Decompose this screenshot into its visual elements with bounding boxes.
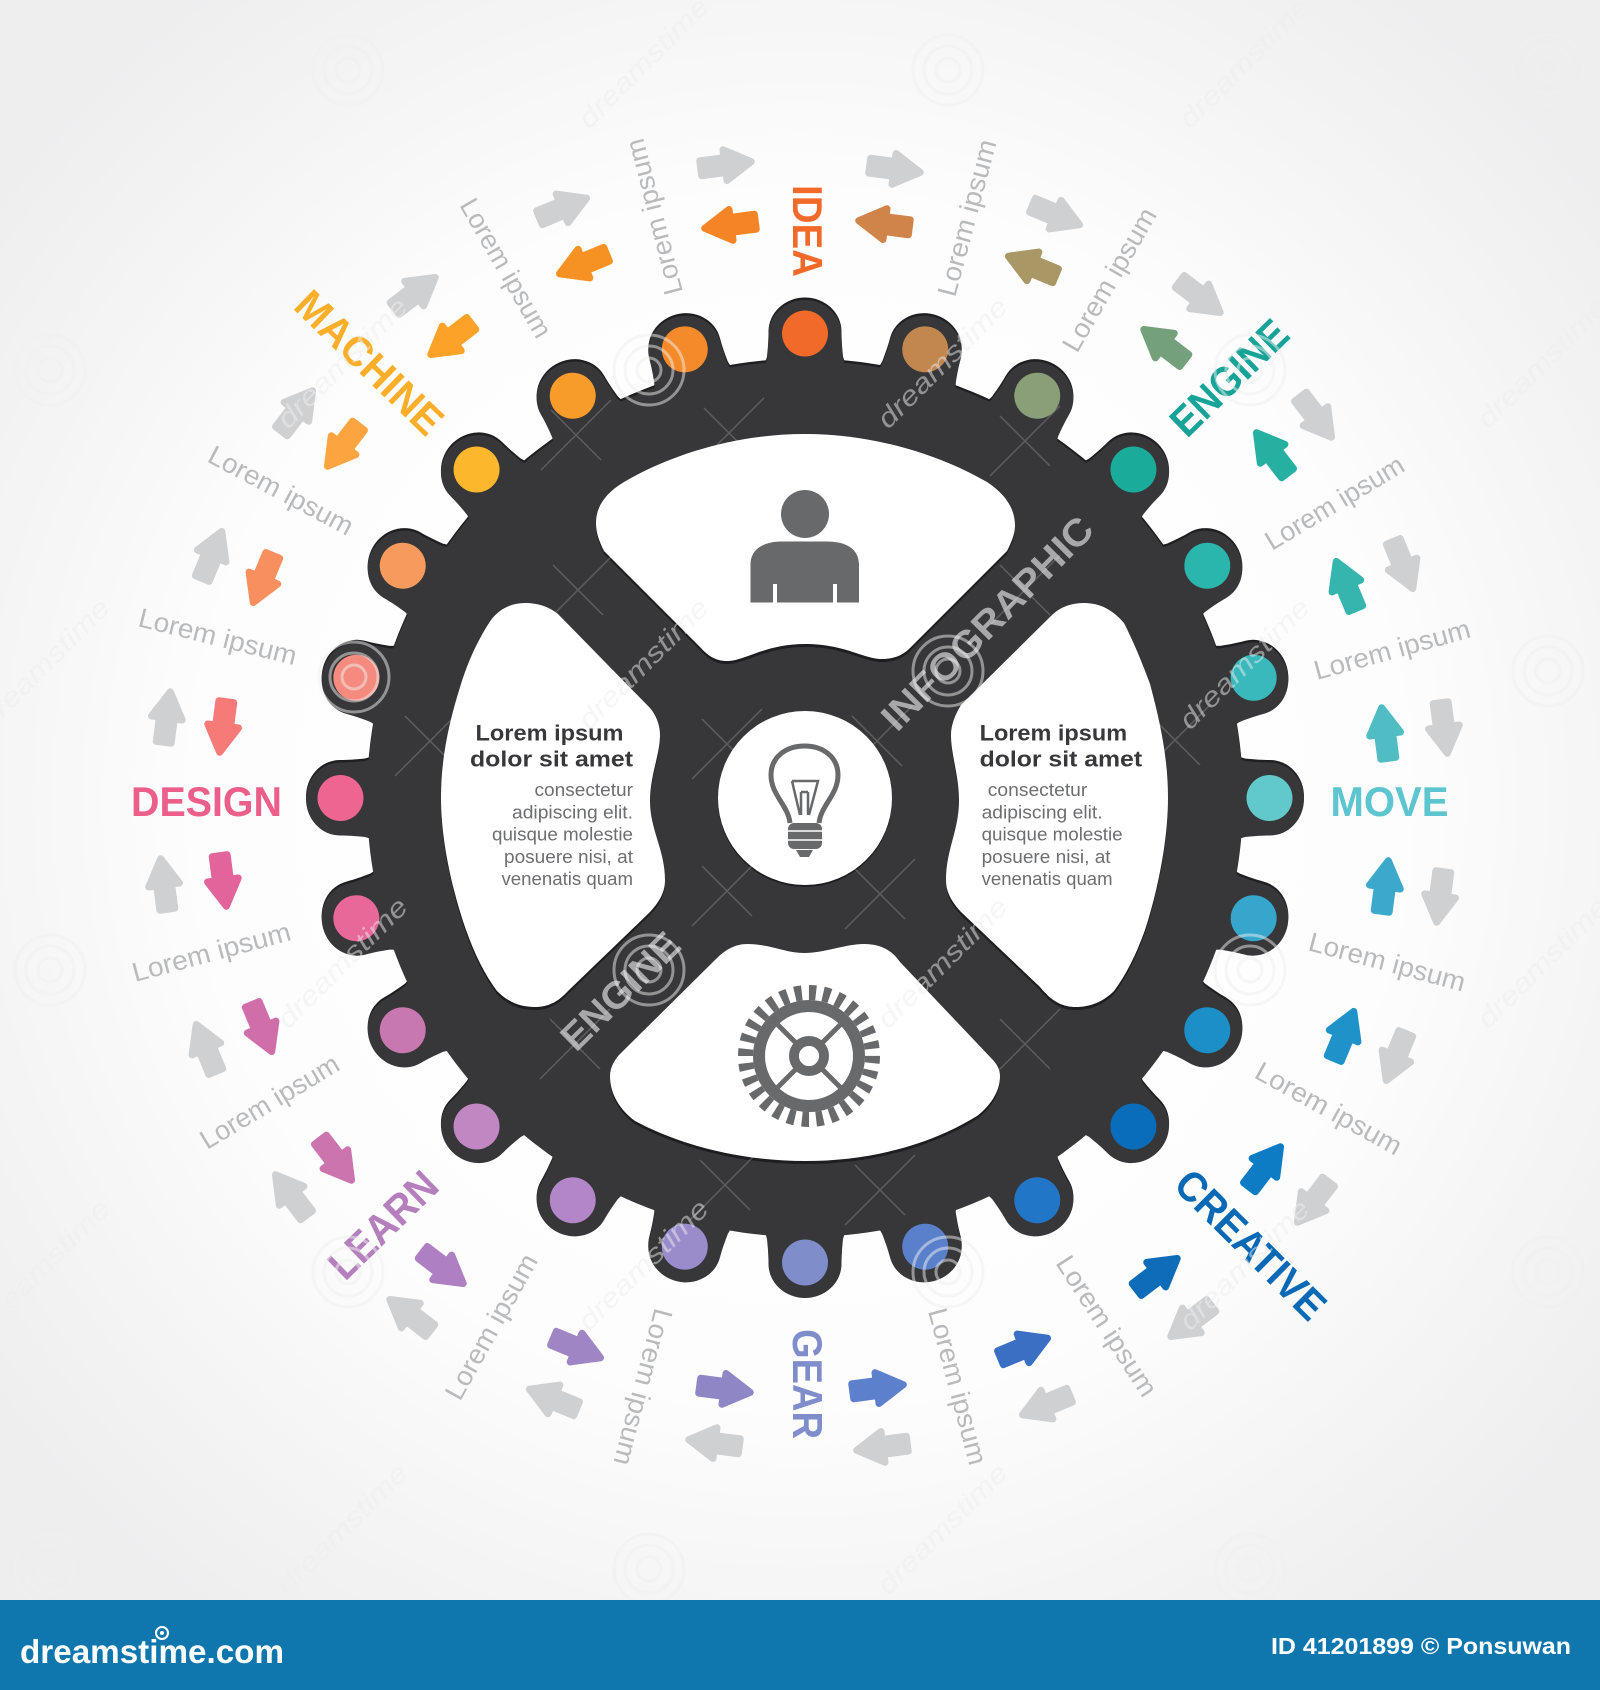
arrow pair 19 <box>148 690 242 754</box>
footer banner <box>0 1600 1600 1690</box>
right panel heading <box>980 721 1143 771</box>
arrow pair 11 <box>995 1324 1075 1429</box>
right panel body text: posuere nisi, at <box>982 847 1111 867</box>
watermark text: dreamstime <box>871 891 1014 1034</box>
caption 15: Lorem ipsum <box>454 193 558 343</box>
watermark text: dreamstime <box>271 891 414 1034</box>
arrow pair 23 <box>534 184 612 288</box>
title: MOVE: MOVE <box>1330 778 1448 825</box>
right panel body text: adipiscing elit. <box>982 802 1103 822</box>
left panel body text: venenatis quam <box>502 869 633 889</box>
gear label: ENGINE: ENGINE <box>553 924 689 1059</box>
arrow pair 7 <box>1366 859 1459 924</box>
footer logo: dreamstime.com <box>20 1633 284 1670</box>
arrow pair 5 <box>1322 536 1427 614</box>
title: GEAR: GEAR <box>784 1329 831 1439</box>
title: CREATIVE: CREATIVE <box>1166 1160 1336 1329</box>
arrow pair 12 <box>851 1369 909 1466</box>
watermark text: dreamstime <box>572 0 715 134</box>
panel: top white shape with person icon <box>596 434 1015 664</box>
caption 4: Lorem ipsum <box>1311 614 1474 686</box>
arrow pair 17 <box>182 999 286 1077</box>
title: IDEA: IDEA <box>784 185 831 277</box>
arrow pair 16 <box>263 1130 364 1225</box>
icon: small gear <box>746 992 872 1120</box>
caption 10: Lorem ipsum <box>439 1249 544 1405</box>
watermark text: dreamstime <box>1471 291 1600 434</box>
right panel body text <box>982 780 1123 889</box>
gear dots ring <box>318 310 1292 1286</box>
caption 12: Lorem ipsum <box>129 917 294 988</box>
caption 14: Lorem ipsum <box>203 440 359 541</box>
watermark text: dreamstime <box>271 1457 414 1600</box>
right panel heading: Lorem ipsum <box>980 721 1127 746</box>
arrow pair 8 <box>1320 1006 1420 1086</box>
icon: person <box>750 490 859 602</box>
watermark text: dreamstime <box>1471 1457 1600 1600</box>
arrow pair 24 <box>699 146 757 244</box>
watermark text: dreamstime <box>572 592 715 735</box>
left panel body text: quisque molestie <box>492 825 633 845</box>
arrow pair 4 <box>1244 387 1344 483</box>
gear label: INFOGRAPHIC: INFOGRAPHIC <box>874 509 1102 739</box>
caption 13: Lorem ipsum <box>136 603 300 671</box>
left panel heading <box>470 721 634 771</box>
caption 16: Lorem ipsum <box>620 136 689 298</box>
caption 9: Lorem ipsum <box>608 1305 678 1469</box>
watermark text: dreamstime <box>1173 0 1316 134</box>
left panel body text: adipiscing elit. <box>512 802 633 822</box>
footer credit: ID 41201899 © Ponsuwan <box>1271 1633 1571 1659</box>
right panel heading: dolor sit amet <box>980 746 1143 771</box>
title: MACHINE: MACHINE <box>286 281 453 444</box>
watermark text: dreamstime <box>1173 1193 1316 1336</box>
icon: light bulb <box>771 746 838 857</box>
gear wheel <box>306 298 1304 1298</box>
right panel body text: venenatis quam <box>982 869 1113 889</box>
title: DESIGN: DESIGN <box>131 778 282 825</box>
caption 6: Lorem ipsum <box>1250 1056 1407 1161</box>
arrow pair 15 <box>380 1240 473 1343</box>
arrow pair 22 <box>385 265 481 367</box>
right panel body text: quisque molestie <box>982 825 1123 845</box>
watermark text: dreamstime <box>271 291 414 434</box>
caption 7: Lorem ipsum <box>1050 1250 1163 1402</box>
arrow pair 6 <box>1366 701 1463 760</box>
caption 2: Lorem ipsum <box>1056 203 1163 357</box>
caption 8: Lorem ipsum <box>922 1305 993 1468</box>
panel: bottom white shape with gear icon <box>610 944 1000 1164</box>
watermark text: dreamstime <box>572 1193 715 1336</box>
watermark text: dreamstime <box>871 291 1014 434</box>
watermark text: dreamstime <box>1173 592 1316 735</box>
arrow pair 18 <box>145 854 242 911</box>
arrow pair 2 <box>1003 191 1085 290</box>
title: ENGINE: ENGINE <box>1161 310 1298 445</box>
right panel body text: consectetur <box>988 780 1087 800</box>
watermark text: dreamstime <box>871 1457 1014 1600</box>
caption 5: Lorem ipsum <box>1305 927 1469 997</box>
caption 3: Lorem ipsum <box>1260 450 1410 556</box>
watermark text: dreamstime <box>1471 891 1600 1034</box>
arrow pair 20 <box>188 526 287 608</box>
panel: left white shape with text <box>441 603 665 1010</box>
arrow pair 10 <box>1127 1246 1221 1349</box>
left panel body text: consectetur <box>534 780 633 800</box>
arrow pair 1 <box>857 150 922 243</box>
left panel heading: Lorem ipsum <box>476 721 624 746</box>
caption 11: Lorem ipsum <box>195 1049 345 1155</box>
panel: right white shape with text <box>946 603 1168 1010</box>
left panel heading: dolor sit amet <box>470 746 634 771</box>
arrow pair 9 <box>1237 1137 1341 1232</box>
arrow pair 13 <box>687 1370 752 1462</box>
title: LEARN: LEARN <box>319 1161 447 1288</box>
left panel body text: posuere nisi, at <box>504 847 633 867</box>
left panel body text <box>492 780 633 889</box>
arrow pair 21 <box>269 381 371 476</box>
caption 1: Lorem ipsum <box>932 136 1002 300</box>
arrow pair 3 <box>1134 269 1230 373</box>
panel: center circle with bulb <box>718 711 892 887</box>
arrow pair 14 <box>524 1324 606 1423</box>
